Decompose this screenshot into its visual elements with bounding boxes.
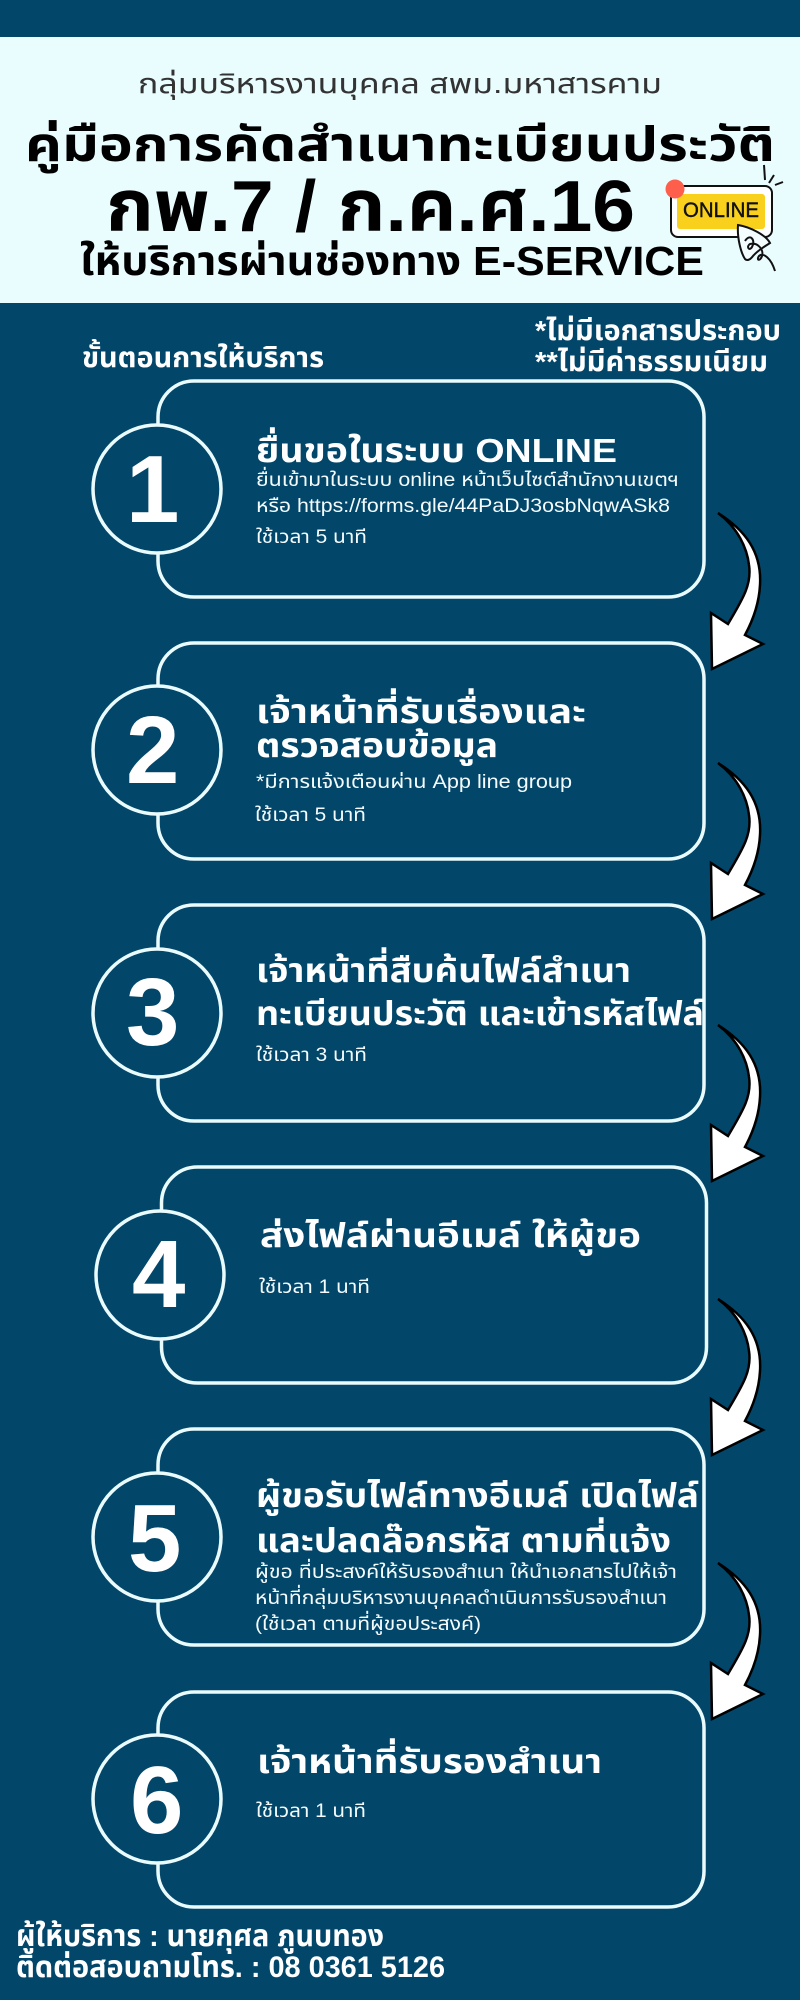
panel: step 2	[93, 643, 704, 859]
footer: service provider: ผู้ให้บริการ : นายกุศล ภูนบทอง	[16, 1920, 384, 1954]
arrow 1 to 2	[711, 513, 763, 669]
panel: step 2: เจ้าหน้าที่รับเรื่องและ	[256, 688, 586, 731]
note: no fee: **ไม่มีค่าธรรมเนียม	[535, 346, 768, 377]
panel: step 1	[93, 381, 704, 597]
organisation name: กลุ่มบริหารงานบุคคล สพม.มหาสารคาม	[138, 68, 662, 100]
panel: step 3	[93, 905, 704, 1121]
panel: step 4: ใช้เวลา 1 นาที	[259, 1275, 370, 1298]
panel: step 5: ผู้ขอรับไฟล์ทางอีเมล์ เปิดไฟล์	[256, 1478, 699, 1516]
panel: step 1: หรือ https://forms.gle/44PaDJ3osbNqwASk8	[256, 496, 670, 517]
arrow 2 to 3	[711, 763, 763, 919]
section heading: steps: ขั้นตอนการให้บริการ	[82, 338, 324, 373]
panel: step 5: หน้าที่กลุ่มบริหารงานบุคคลดำเนินการรับรองสำเนา	[255, 1584, 667, 1609]
panel: step 5: และปลดล๊อกรหัส ตามที่แจ้ง	[256, 1517, 671, 1560]
panel: step 3: 3	[126, 959, 179, 1066]
panel: step 5: ผู้ขอ ที่ประสงค์ให้รับรองสำเนา ให้นำเอกสารไปให้เจ้า	[255, 1558, 677, 1584]
panel: step 6: 6	[130, 1747, 183, 1854]
form codes: กพ.7 / ก.ค.ศ.16	[106, 167, 635, 247]
panel: step 4: 4	[132, 1221, 185, 1328]
arrow 4 to 5	[711, 1299, 763, 1455]
panel: step 6: เจ้าหน้าที่รับรองสำเนา	[257, 1738, 602, 1781]
panel: step 1: ใช้เวลา 5 นาที	[256, 525, 367, 548]
note: no documents: *ไม่มีเอกสารประกอบ	[535, 315, 781, 346]
panel: step 5: 5	[128, 1485, 181, 1592]
title: คู่มือการคัดสำเนาทะเบียนประวัติ	[25, 119, 775, 174]
panel: step 3: ใช้เวลา 3 นาที	[256, 1043, 367, 1066]
icon: online button: ONLINE	[683, 199, 759, 222]
panel: step 1: 1	[126, 436, 179, 543]
header panel	[0, 37, 800, 303]
panel: step 1: ยื่นขอในระบบ ONLINE	[256, 427, 617, 470]
footer: phone contact: ติดต่อสอบถามโทร. : 08 0361 5126	[16, 1951, 445, 1984]
panel: step 2: *มีการแจ้งเตือนผ่าน App line group	[256, 770, 572, 793]
panel: step 6	[93, 1692, 704, 1907]
panel: step 4: ส่งไฟล์ผ่านอีเมล์ ให้ผู้ขอ	[260, 1218, 641, 1256]
arrow 5 to 6	[711, 1563, 763, 1719]
panel: step 2: 2	[126, 697, 179, 804]
panel: step 5	[93, 1429, 704, 1645]
panel: step 6: ใช้เวลา 1 นาที	[256, 1799, 366, 1822]
panel: step 5: (ใช้เวลา ตามที่ผู้ขอประสงค์)	[255, 1610, 481, 1636]
panel: step 2: ใช้เวลา 5 นาที	[255, 803, 366, 826]
panel: step 4	[96, 1167, 706, 1383]
panel: step 1: ยื่นเข้ามาในระบบ online หน้าเว็บไซต์สำนักงานเขตฯ	[256, 466, 679, 491]
subtitle: ให้บริการผ่านช่องทาง E-SERVICE	[80, 238, 704, 284]
icon: online button	[666, 165, 783, 271]
panel: step 3: เจ้าหน้าที่สืบค้นไฟล์สำเนา	[256, 947, 631, 990]
panel: step 2: ตรวจสอบข้อมูล	[256, 728, 498, 766]
arrow 3 to 4	[711, 1025, 763, 1181]
panel: step 3: ทะเบียนประวัติ และเข้ารหัสไฟล์	[256, 996, 704, 1033]
